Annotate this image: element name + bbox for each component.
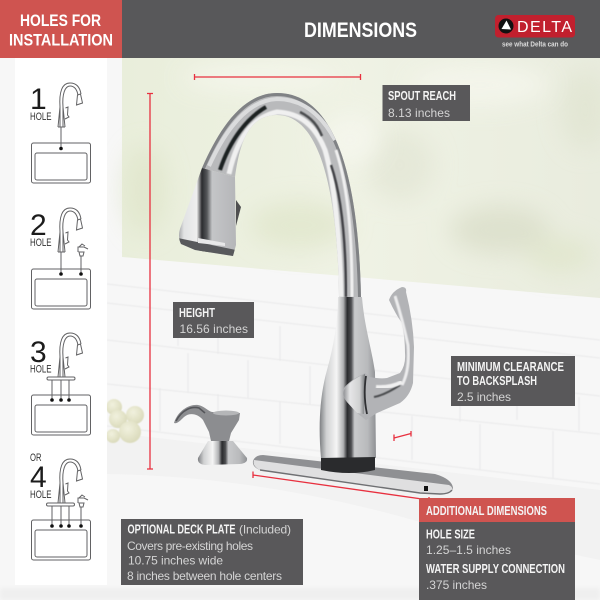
icon: or 4 hole: HOLE bbox=[30, 489, 52, 501]
header: holes for installation bbox=[0, 0, 122, 58]
background: counter bbox=[0, 432, 600, 600]
icon: 1 hole: HOLE bbox=[30, 111, 52, 123]
callout: minimum clearance: 2.5 inches bbox=[457, 390, 511, 404]
callout: height: HEIGHT bbox=[179, 305, 215, 320]
callout: optional deck plate: (Included) bbox=[239, 522, 291, 536]
logo: Delta: see what Delta can do bbox=[502, 42, 568, 48]
icon: or 4 hole bbox=[30, 452, 90, 560]
panel: additional dimensions: .375 inches bbox=[426, 578, 487, 592]
icon: 2 hole: 2 bbox=[30, 209, 47, 242]
icon: 3 hole: HOLE bbox=[30, 364, 52, 376]
logo: Delta bbox=[495, 15, 575, 48]
dimension line: spout reach bbox=[194, 74, 360, 80]
callout: optional deck plate: OPTIONAL DECK PLATE bbox=[128, 522, 236, 536]
icon: 3 hole bbox=[30, 333, 90, 435]
callout: height bbox=[173, 302, 254, 338]
header: holes for installation: HOLES FOR bbox=[20, 11, 101, 30]
icon: 3 hole: 3 bbox=[30, 336, 47, 369]
callout: optional deck plate: Covers pre-existing holes bbox=[127, 539, 253, 553]
faucet base collar bbox=[321, 457, 375, 473]
background: window view bbox=[122, 58, 600, 298]
callout: optional deck plate: 8 inches between hole centers bbox=[127, 569, 282, 583]
callout: spout reach bbox=[382, 85, 470, 121]
icon: 2 hole bbox=[30, 208, 90, 309]
header: holes for installation: INSTALLATION bbox=[9, 30, 113, 50]
icon: or 4 hole: 4 bbox=[30, 461, 47, 494]
background: grapes bbox=[106, 399, 144, 443]
icon: 1 hole: 1 bbox=[30, 83, 47, 116]
title: DIMENSIONS bbox=[304, 19, 417, 42]
panel: additional dimensions: 1.25–1.5 inches bbox=[426, 543, 511, 557]
callout: spout reach: 8.13 inches bbox=[388, 106, 450, 120]
faucet body bbox=[320, 297, 376, 458]
header bar bbox=[0, 0, 600, 58]
icon: 2 hole: HOLE bbox=[30, 237, 52, 249]
callout: spout reach: SPOUT REACH bbox=[388, 88, 456, 103]
faucet handle bbox=[343, 287, 414, 420]
dimension line: backsplash clearance bbox=[394, 431, 411, 441]
deck plate bbox=[253, 455, 453, 494]
callout: minimum clearance: MINIMUM CLEARANCE bbox=[457, 359, 564, 374]
dimension line: deck plate width bbox=[253, 472, 429, 503]
faucet spray head bbox=[179, 168, 241, 256]
panel: additional dimensions: ADDITIONAL DIMENSIONS bbox=[426, 503, 547, 518]
soap dispenser bbox=[174, 405, 247, 465]
left icon panel bbox=[15, 58, 107, 585]
callout: minimum clearance: TO BACKSPLASH bbox=[457, 373, 537, 388]
dimension line: height bbox=[147, 94, 153, 469]
callout: optional deck plate bbox=[121, 519, 303, 585]
callout: optional deck plate: 10.75 inches wide bbox=[128, 554, 223, 568]
panel: additional dimensions bbox=[419, 498, 575, 600]
background: wall tile lines bbox=[107, 284, 600, 484]
panel: additional dimensions: HOLE SIZE bbox=[426, 526, 475, 542]
faucet neck bbox=[202, 93, 361, 297]
callout: minimum clearance bbox=[451, 356, 575, 406]
icon: 1 hole bbox=[30, 83, 90, 183]
logo: Delta: DELTA bbox=[517, 19, 572, 36]
callout: height: 16.56 inches bbox=[180, 322, 248, 336]
icon: or 4 hole: OR bbox=[30, 452, 42, 464]
